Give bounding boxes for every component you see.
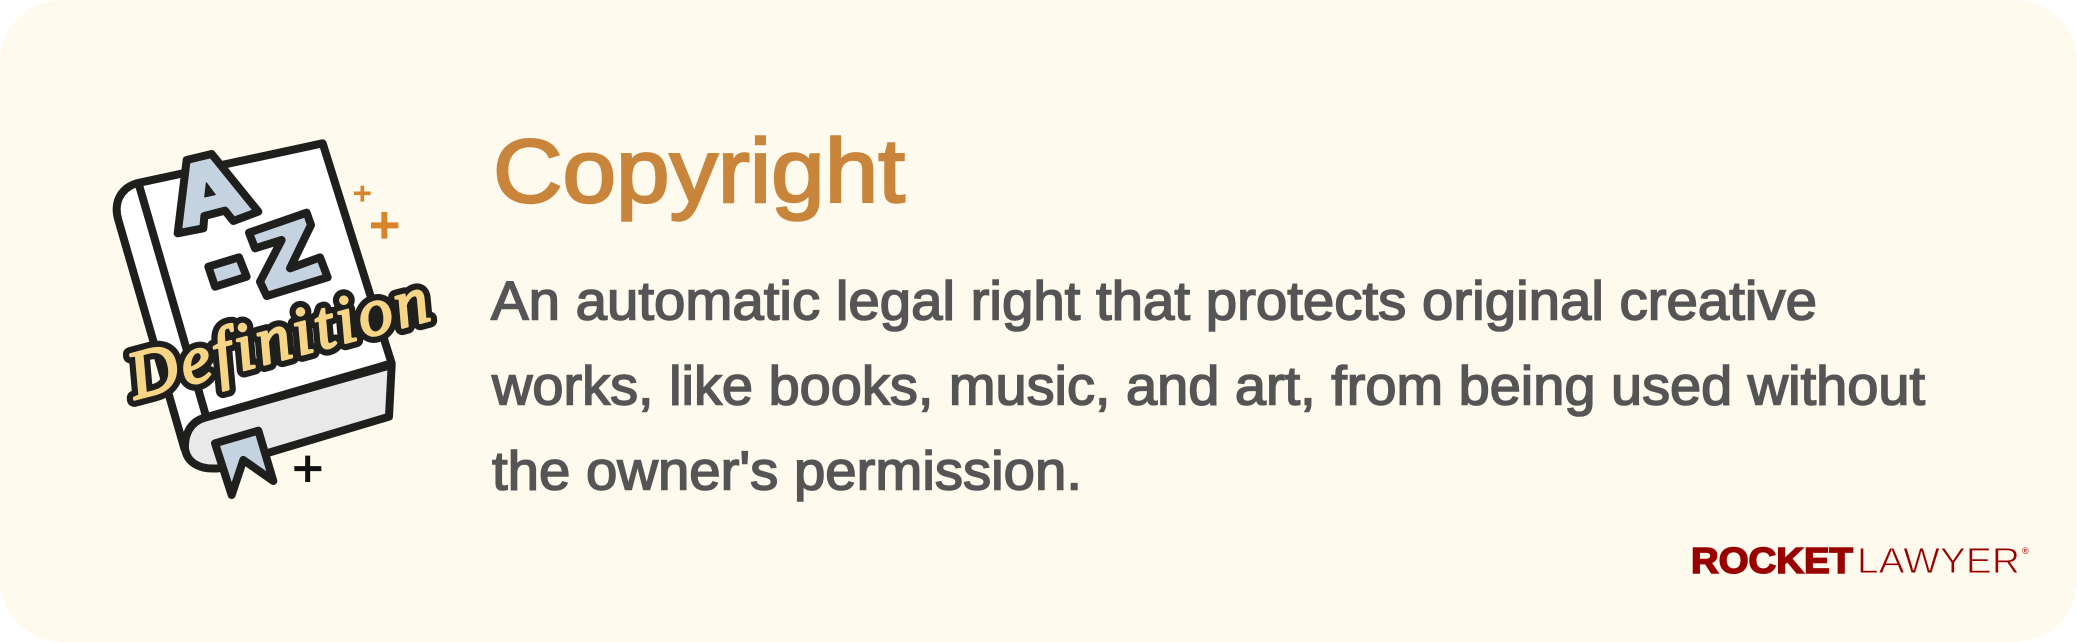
counter of letter A [205, 183, 215, 197]
orange sparkle small [354, 186, 371, 202]
bookmark [215, 431, 273, 495]
line 2: works, like books, music, and art, from being used without [491, 356, 1925, 416]
book cover [117, 143, 392, 448]
line 3: the owner's permission. [492, 440, 1082, 502]
script word Definition: Definition [118, 261, 437, 414]
line 1: An automatic legal right that protects original creative [491, 270, 1817, 332]
icon: definition book [117, 143, 437, 495]
letter A [178, 154, 258, 233]
black sparkle [294, 456, 321, 482]
book spine line [139, 185, 206, 415]
registered mark: ® [2022, 546, 2029, 556]
script word Definition: Definition [118, 261, 437, 414]
dash between letters [208, 257, 247, 287]
letter Z [249, 213, 328, 296]
definition text [491, 270, 1925, 502]
logo: Rocket Lawyer [1691, 540, 2029, 581]
book pages [185, 365, 392, 469]
logo word ROCKET: ROCKET [1691, 540, 1853, 581]
title: Copyright [493, 122, 905, 222]
orange sparkle large [371, 212, 398, 239]
logo word LAWYER: LAWYER [1857, 540, 2020, 581]
